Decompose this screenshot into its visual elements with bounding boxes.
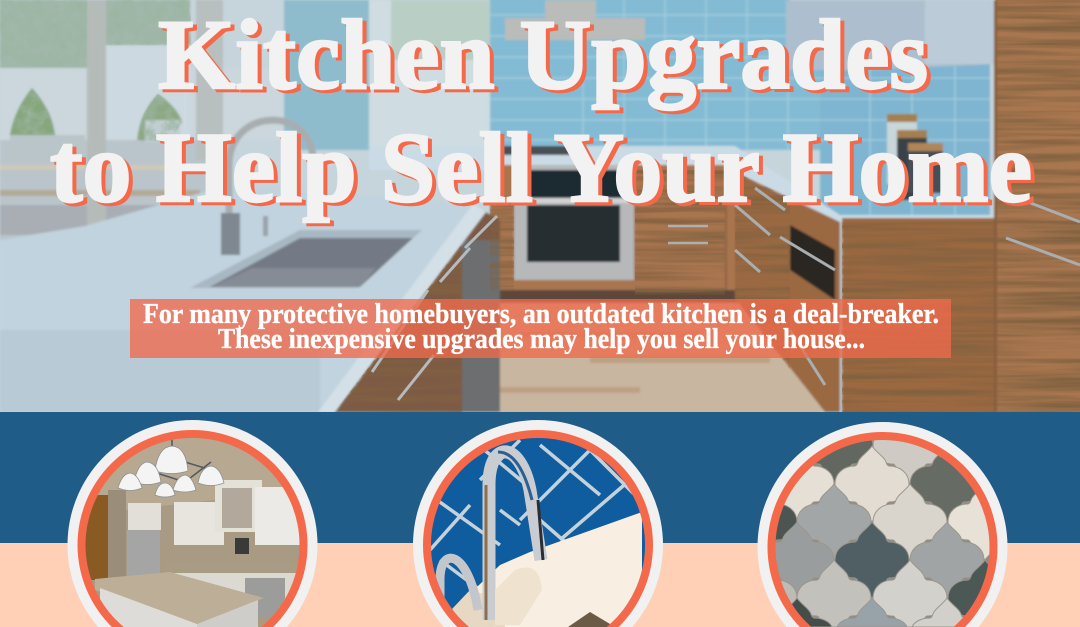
- intro callout panel: For many protective homebuyers, an outdated kitchen is a deal-breaker.: [143, 299, 939, 330]
- background photo: modern kitchen: [0, 0, 1080, 412]
- window pillars: [87, 0, 223, 230]
- back counter: [369, 146, 1000, 222]
- title: to Help Sell Your Home: [50, 112, 1032, 223]
- island countertop: [0, 186, 473, 412]
- wood grain texture: [335, 0, 1080, 412]
- floor: [480, 296, 830, 412]
- window view with trees: [0, 0, 285, 240]
- blue band: [0, 412, 1080, 543]
- faucet: [221, 120, 313, 255]
- intro callout panel: [130, 299, 951, 358]
- storage jars: [887, 114, 943, 200]
- title: Kitchen Upgrades: [158, 0, 928, 110]
- peach band: [0, 543, 1080, 627]
- blue tiled wall: [284, 0, 990, 220]
- range hood: [505, 0, 645, 40]
- oven: [503, 146, 634, 280]
- circle photo: kitchen with island and pendant lights: [68, 420, 317, 627]
- title: [50, 0, 1032, 223]
- island wood cabinets: [320, 205, 500, 412]
- upper white cabinets: [786, 0, 995, 70]
- right base cabinet: [842, 218, 997, 412]
- circle photo: arabesque grey tile: [758, 422, 1008, 627]
- right tall wood cabinet: [996, 0, 1080, 412]
- lower wood cabinets: [490, 165, 740, 295]
- intro callout panel: These inexpensive upgrades may help you sell your house...: [218, 324, 865, 355]
- tree foliage texture: [0, 0, 191, 142]
- circle photo: chrome faucets and blue herringbone tile: [413, 420, 663, 627]
- side cabinet run: [735, 172, 840, 412]
- sink: [190, 230, 422, 288]
- cabinet handles: [372, 188, 1080, 400]
